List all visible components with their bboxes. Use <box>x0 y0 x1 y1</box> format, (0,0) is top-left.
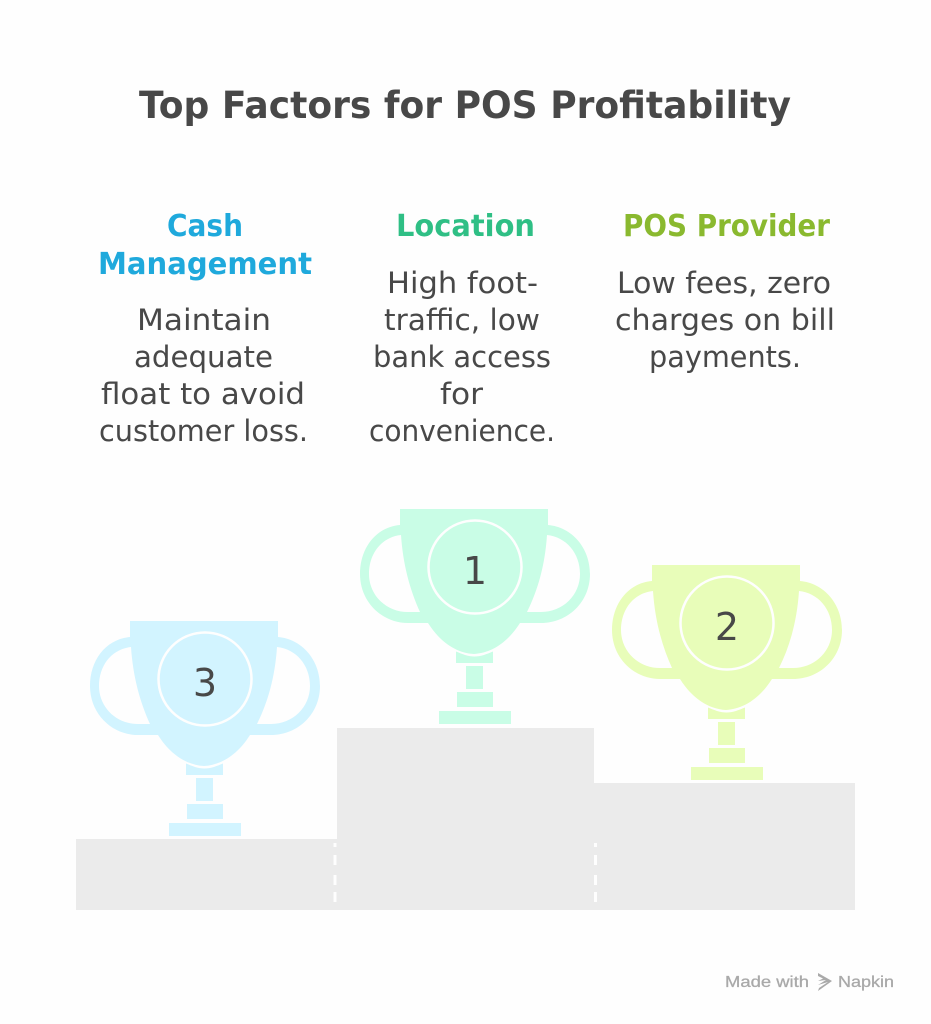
watermark: made with napkin: Napkin <box>838 974 894 991</box>
text: cash management description: float to avoid <box>101 377 305 411</box>
text: cash management description: customer loss. <box>99 414 308 448</box>
text: pos provider description: charges on bill <box>615 303 835 337</box>
watermark: made with napkin <box>725 973 894 991</box>
heading: cash management: Management <box>98 247 312 282</box>
watermark: made with napkin: Made with <box>725 974 809 991</box>
heading: cash management <box>98 209 312 282</box>
heading: pos provider: POS Provider <box>623 209 830 244</box>
trophy: rank 2 <box>612 565 842 780</box>
number 1: 1 <box>463 549 487 593</box>
text: location description: High foot- <box>387 266 538 300</box>
text: cash management description: Maintain <box>137 303 271 337</box>
text: location description <box>369 266 555 448</box>
trophy: rank 3 <box>90 621 320 836</box>
text: pos provider description: payments. <box>649 340 801 374</box>
text: location description: convenience. <box>369 414 555 448</box>
number 3: 3 <box>193 661 217 705</box>
text: location description: traffic, low <box>384 303 540 337</box>
text: pos provider description: Low fees, zero <box>617 266 831 300</box>
column: location <box>369 209 555 448</box>
column: pos provider <box>615 209 835 374</box>
text: location description: for <box>440 377 483 411</box>
number 2: 2 <box>715 605 739 649</box>
title: Top Factors for POS Profitability <box>139 84 791 127</box>
text: cash management description: adequate <box>134 340 273 374</box>
text: location description: bank access <box>373 340 551 374</box>
heading: cash management: Cash <box>167 209 243 244</box>
column: cash management <box>98 209 312 448</box>
trophy: rank 1 <box>360 509 590 724</box>
icon: napkin logo <box>818 973 832 991</box>
podium <box>76 728 855 910</box>
text: cash management description <box>99 303 308 448</box>
heading: location: Location <box>396 209 535 244</box>
text: pos provider description <box>615 266 835 374</box>
